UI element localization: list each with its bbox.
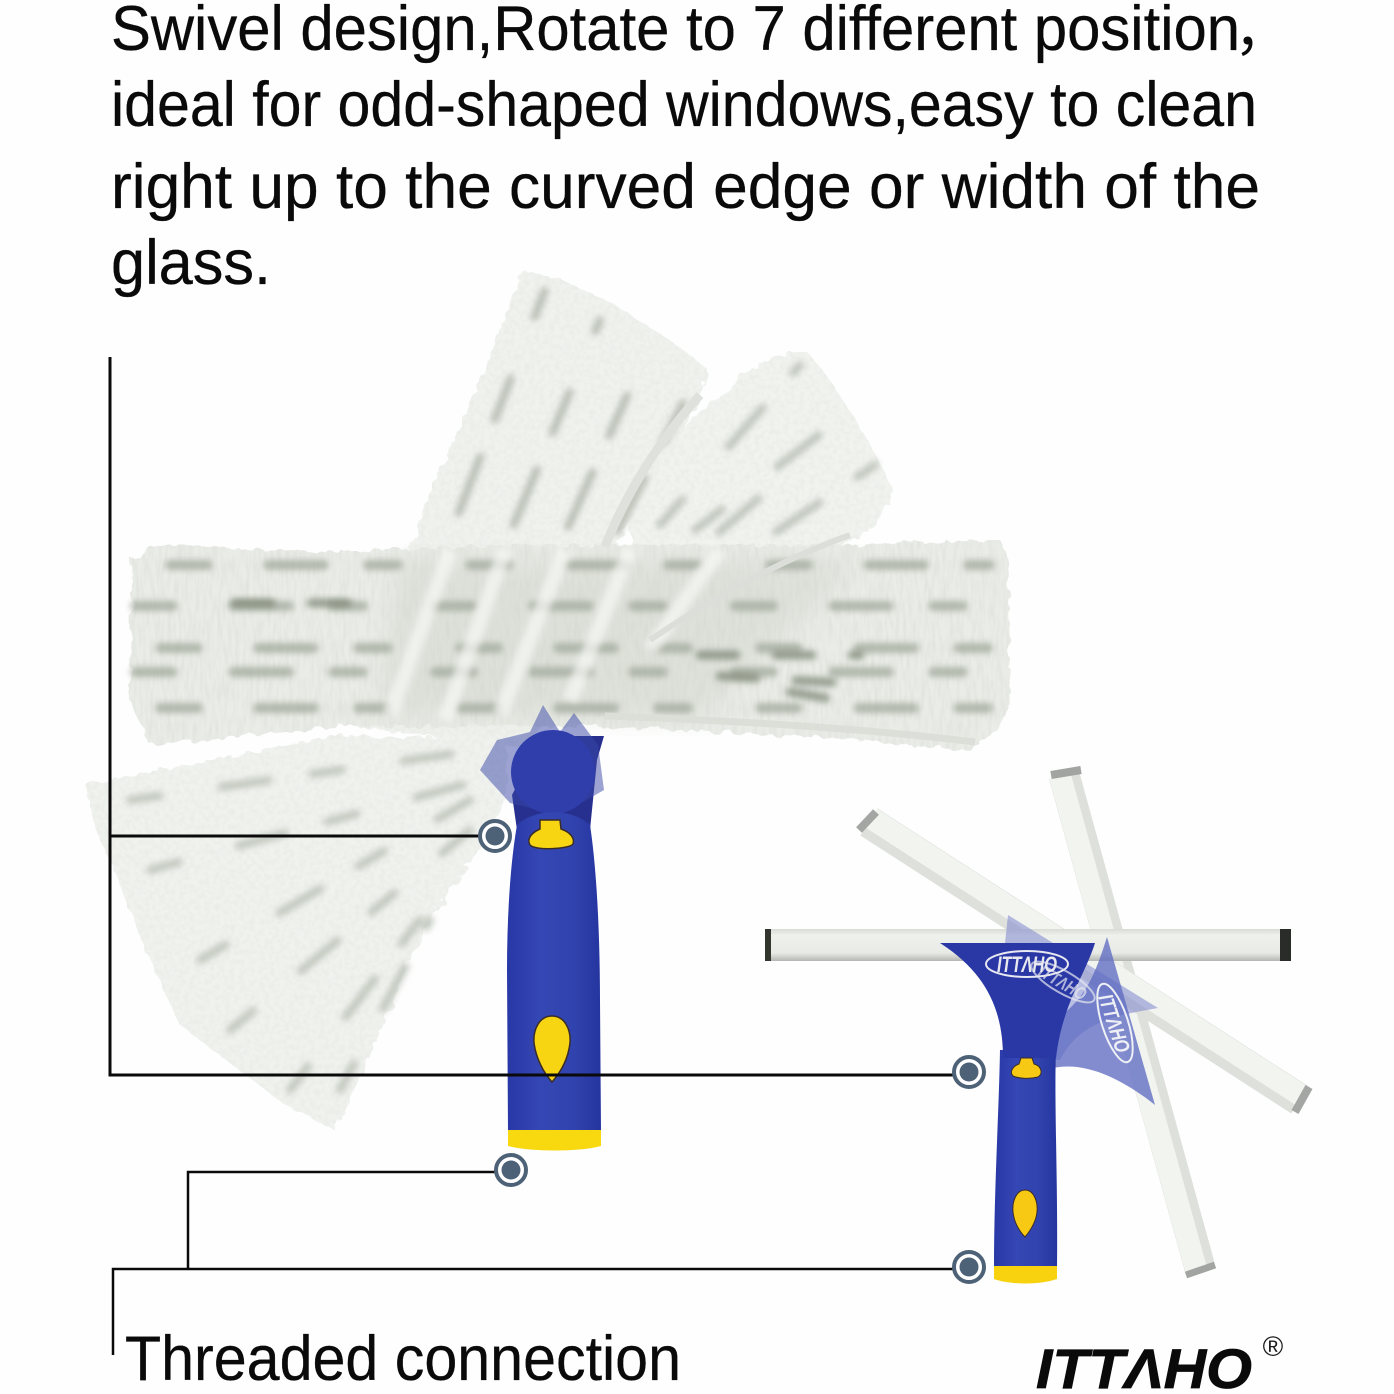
small handle body — [994, 1050, 1057, 1268]
pad: lower left fan — [85, 735, 508, 1130]
handle body — [507, 812, 601, 1132]
yellow end cap — [508, 1130, 601, 1150]
large handle with swivel head — [480, 705, 604, 1150]
logo oval on head: ITTΛHO — [997, 952, 1057, 977]
overlap streaks of rotated pads through horizontal pad — [390, 550, 720, 720]
small yellow slider — [1011, 1058, 1041, 1078]
translucent rotated blade head — [1000, 915, 1158, 1060]
right end cap — [1280, 929, 1291, 961]
heading text: ideal for odd-shaped windows,easy to clean — [111, 70, 1257, 140]
sleeve seam curve — [590, 395, 700, 590]
callout marker: small handle end — [954, 1252, 984, 1282]
pad: upper rotated — [345, 272, 708, 750]
small squeegee with rotated positions — [765, 770, 1309, 1284]
registered mark: ® — [1263, 1331, 1284, 1362]
threaded connection label: Threaded connection — [125, 1324, 681, 1394]
translucent rotated head positions — [480, 705, 604, 815]
sleeve seam curve right — [650, 535, 850, 640]
darker overlap zone — [380, 560, 860, 720]
callout marker: small handle top — [954, 1057, 984, 1087]
small yellow teardrop — [1013, 1190, 1037, 1237]
heading text — [111, 0, 1290, 298]
yellow slider button — [529, 820, 573, 849]
blue blade head — [940, 943, 1095, 1058]
pad: horizontal — [130, 540, 1010, 750]
left end cap — [765, 929, 771, 961]
sleeve seam along bottom edge — [605, 716, 975, 742]
heading text: right up to the curved edge or width of the — [111, 152, 1260, 222]
microfiber scrubber sleeve fan — [85, 272, 1010, 1130]
rotated channel bars — [859, 770, 1309, 1275]
heading text: glass. — [111, 228, 271, 298]
pad: upper right rotated — [628, 350, 893, 640]
swivel disc — [511, 730, 595, 814]
callout marker: top handle — [480, 821, 510, 851]
callout marker: large handle end — [496, 1155, 526, 1185]
swivel head base — [512, 736, 604, 830]
heading text: ， — [1234, 0, 1290, 62]
logo oval steep: ITTΛHO — [1093, 991, 1134, 1056]
horizontal channel bar — [770, 929, 1282, 961]
translucent rotated blade head 2 — [1053, 937, 1155, 1105]
small yellow end cap — [994, 1266, 1057, 1284]
callout lines — [110, 357, 954, 1355]
logo oval rotated: ITTΛHO — [1035, 961, 1090, 1005]
yellow teardrop grip — [534, 1016, 570, 1082]
